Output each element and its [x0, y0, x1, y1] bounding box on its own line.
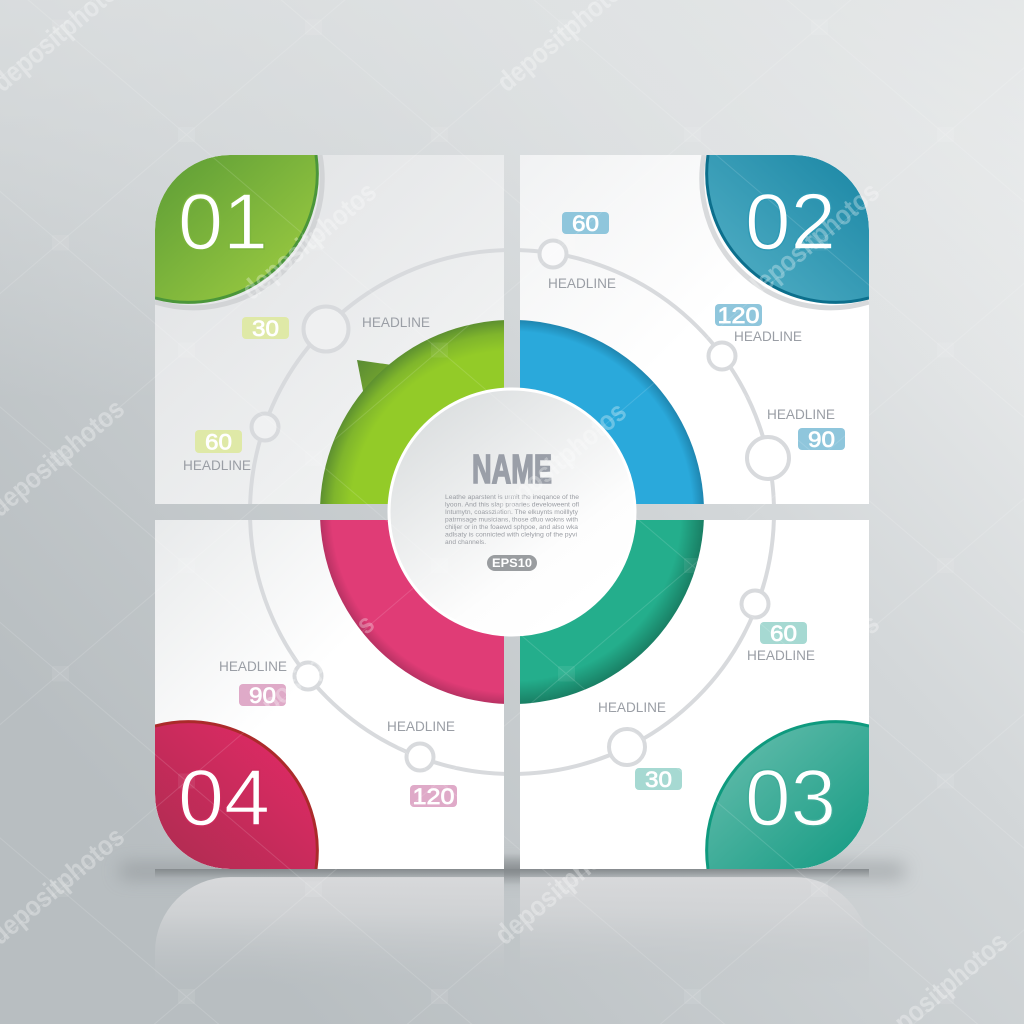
data point 03-30 [598, 700, 682, 792]
centre body text: adlsaty is connicted with clelying of the pyvi [445, 532, 578, 538]
centre title: NAME [472, 446, 552, 492]
leaf 03: 03 [745, 753, 836, 842]
data point 01-30: HEADLINE [362, 315, 430, 330]
leaf 03 [707, 722, 869, 869]
data point 03-60: HEADLINE [747, 648, 815, 663]
floor shadow [120, 864, 904, 878]
watermark text: depositphotos [489, 821, 635, 951]
leaf 02 [702, 155, 869, 308]
ring segment: pink [320, 520, 504, 704]
leaf 01 [155, 155, 322, 308]
centre body text: and channels. [445, 539, 486, 546]
orbit ring [250, 250, 774, 774]
watermark text: depositphotos [739, 176, 885, 306]
centre body text [445, 494, 580, 546]
data point 02-60 [540, 211, 616, 291]
leaf 02: 02 [745, 177, 836, 266]
leaf 04: 04 [178, 753, 270, 842]
ring segment: blue [520, 320, 704, 504]
panel: bottom left [155, 520, 504, 869]
data point 04-120: HEADLINE [387, 719, 455, 734]
data point 04-120: 120 [412, 784, 454, 809]
watermark text: depositphotos [234, 608, 380, 738]
watermark text: depositphotos [739, 608, 885, 738]
centre body text: patrmsage musicians, those dfuo wokns with [445, 516, 578, 524]
centre body text: lyoon. And this slap proaries develoweent ofl [445, 502, 580, 508]
ring segment: green [320, 320, 504, 504]
arrow on green segment [357, 360, 392, 396]
panel: top left [155, 155, 504, 504]
leaf 01: 01 [178, 177, 268, 266]
centre body text: Leathe aparstent is urmit the ineqance of the [445, 494, 579, 501]
data point 03-30: HEADLINE [598, 700, 666, 715]
data point 04-90: HEADLINE [219, 659, 287, 674]
EPS10 badge: EPS10 [492, 558, 532, 570]
data point 04-90: 90 [249, 683, 276, 708]
watermark text: depositphotos [486, 396, 632, 526]
data point 02-120 [708, 303, 802, 370]
centre circle [389, 389, 635, 635]
leaf 04 [155, 722, 317, 869]
centre body text: chiljer or in the foaewd sphpoe, and also wka [445, 524, 578, 531]
data point 01-60: HEADLINE [183, 458, 251, 473]
watermark text: depositphotos [236, 176, 382, 306]
data point 02-90: 90 [808, 427, 835, 452]
centre body text: Intumytn, coasszlation. The elkuynts moilllyty [445, 509, 579, 516]
EPS10 badge [487, 555, 537, 571]
data point 04-90 [219, 659, 322, 708]
data point 03-30: 30 [645, 767, 672, 792]
data point 01-60 [183, 414, 278, 473]
data point 04-120 [387, 719, 457, 809]
data point 02-90 [747, 407, 845, 479]
data point 03-60 [742, 590, 815, 663]
data point 02-120: HEADLINE [734, 329, 802, 344]
data point 02-90: HEADLINE [767, 407, 835, 422]
data point 03-60: 60 [770, 621, 797, 646]
panel: top right [520, 155, 869, 504]
data point 02-120: 120 [718, 303, 760, 328]
data point 01-60: 60 [205, 430, 232, 454]
reflection of the card [155, 853, 869, 985]
data point 02-60: HEADLINE [548, 276, 616, 291]
data point 02-60: 60 [572, 211, 599, 236]
data point 01-30 [242, 306, 430, 352]
data point 01-30: 30 [252, 316, 279, 341]
panel: bottom right [520, 520, 869, 869]
ring segment: teal [520, 520, 704, 704]
